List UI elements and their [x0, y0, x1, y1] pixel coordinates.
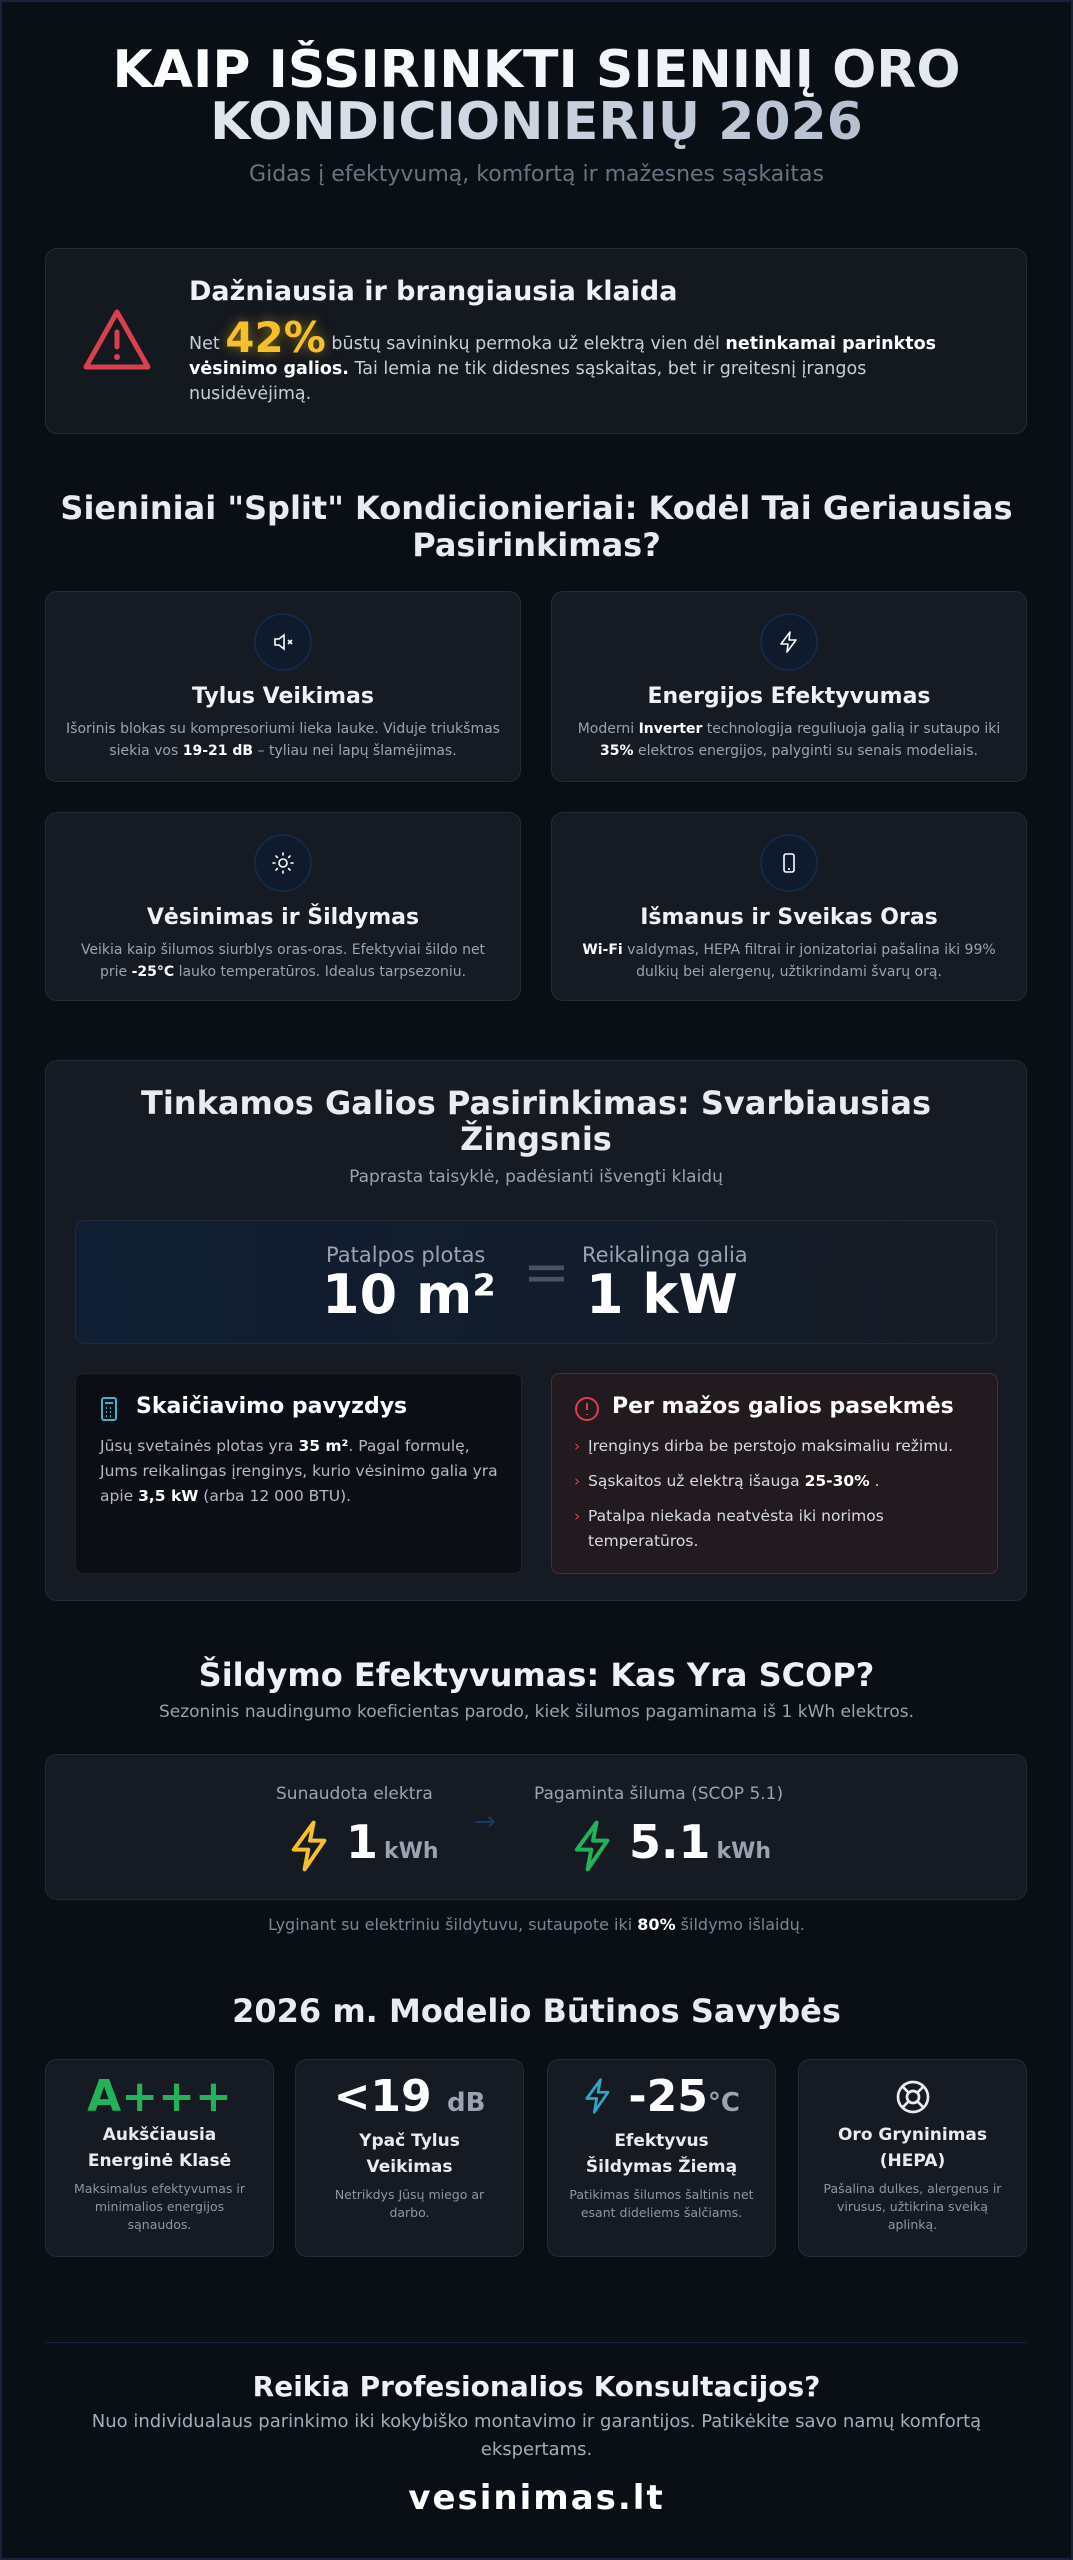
SCOP note: Lyginant su elektriniu šildytuvu, sutaupote iki 80% šildymo išlaidų. — [268, 1915, 805, 1934]
example box: Skaičiavimo pavyzdys — [136, 1394, 407, 1419]
formula box: 1 kW — [586, 1263, 738, 1326]
power heading: Žingsnis — [460, 1120, 612, 1158]
icon: sun — [254, 834, 312, 892]
panel: smart — [551, 812, 1027, 1001]
heading: split: Sieniniai "Split" Kondicionieriai: Kodėl Tai Geriausias — [60, 489, 1013, 527]
feature: quiet: Netrikdys Jūsų miego ar darbo. — [335, 2187, 484, 2220]
panel: energy: Energijos Efektyvumas — [647, 684, 931, 709]
consequences box: Per mažos galios pasekmės — [612, 1394, 954, 1419]
consequences box: › — [574, 1437, 580, 1455]
SCOP subtitle: Sezoninis naudingumo koeficientas parodo, kiek šilumos pagaminama iš 1 kWh elektros. — [159, 1702, 914, 1722]
panel: energy: Moderni Inverter technologija reguliuoja galią ir sutaupo iki 35% elektros energijos, palyginti su senais modeliais. — [578, 721, 1000, 759]
feature: A+++ — [45, 2059, 274, 2257]
consequences box — [551, 1373, 998, 1574]
CTA text: Nuo individualaus parinkimo iki kokybiško montavimo ir garantijos. Patikėkite savo namų komfortą ekspertams. — [92, 2411, 981, 2460]
icon: yellow bolt — [292, 1820, 326, 1872]
icon: calculator — [101, 1397, 117, 1421]
panel: smart: Wi-Fi valdymas, HEPA filtrai ir jonizatoriai pašalina iki 99% dulkių bei alergenų, užtikrindami švarų orą. — [582, 942, 996, 980]
feature: HEPA: Oro Gryninimas (HEPA) — [838, 2125, 987, 2171]
icon: alert circle — [575, 1397, 599, 1421]
panel: alert — [45, 248, 1027, 434]
feature: HEPA: Pašalina dulkes, alergenus ir virusus, užtikrina sveiką aplinką. — [824, 2181, 1001, 2232]
title: KAIP IŠSIRINKTI SIENINĮ ORO — [112, 40, 961, 100]
panel: quiet: Išorinis blokas su kompresoriumi lieka lauke. Viduje triukšmas siekia vos 19-21 dB – tyliau nei lapų šlamėjimas. — [66, 721, 500, 759]
formula box: = — [523, 1240, 570, 1305]
feature: quiet: Ypač Tylus Veikimas — [359, 2131, 460, 2177]
subtitle: Gidas į efektyvumą, komfortą ir mažesnes sąskaitas — [249, 162, 824, 187]
consequences box: › — [574, 1472, 580, 1490]
alert text: Net 42% būstų savininkų permoka už elektrą vien dėl netinkamai parinktos vėsinimo galios. Tai lemia ne tik didesnes sąskaitas, bet ir greitesnį įrangos nusidėvėjimą. — [189, 313, 936, 404]
panel: SCOP comparison: 1 kWh — [346, 1815, 439, 1869]
feature: A+++: A+++ — [87, 2071, 232, 2122]
heading: split: Pasirinkimas? — [412, 526, 661, 564]
panel: power sizing — [45, 1060, 1027, 1601]
feature: A+++: Maksimalus efektyvumas ir minimalios energijos sąnaudos. — [74, 2181, 245, 2232]
feature: -25C — [547, 2059, 776, 2257]
arrow: → — [474, 1807, 496, 1837]
consequences box: Sąskaitos už elektrą išauga 25-30% . — [588, 1472, 880, 1490]
panel: SCOP comparison — [45, 1754, 1027, 1900]
power subtitle: Paprasta taisyklė, padėsianti išvengti klaidų — [349, 1167, 723, 1187]
consequences box: Patalpa niekada neatvėsta iki norimos temperatūros. — [588, 1507, 884, 1550]
icon: green bolt — [574, 1820, 610, 1872]
panel: SCOP comparison: 5.1 kWh — [629, 1815, 771, 1869]
panel: quiet — [45, 591, 521, 782]
panel: heating: Veikia kaip šilumos siurblys oras-oras. Efektyviai šildo net prie -25°C lauko temperatūros. Idealus tarpsezoniu. — [81, 942, 485, 980]
title: KONDICIONIERIŲ 2026 — [210, 92, 863, 152]
example box: Jūsų svetainės plotas yra 35 m². Pagal formulę, Jums reikalingas įrenginys, kurio vėsinimo galia yra apie 3,5 kW (arba 12 000 BTU). — [100, 1437, 498, 1505]
consequences box: Įrenginys dirba be perstojo maksimaliu režimu. — [588, 1437, 953, 1455]
feature: -25C: Efektyvus Šildymas Žiemą — [586, 2131, 737, 2177]
power heading: Tinkamos Galios Pasirinkimas: Svarbiausias — [141, 1084, 931, 1122]
feature: HEPA — [798, 2059, 1027, 2257]
panel: smart: Išmanus ir Sveikas Oras — [640, 905, 938, 930]
feature: -25C: -25°C — [628, 2071, 740, 2122]
icon: mute — [254, 613, 312, 671]
icon: phone — [760, 834, 818, 892]
consequences box: › — [574, 1507, 580, 1525]
icon: warning triangle — [84, 310, 150, 370]
feature: A+++: Aukščiausia Energinė Klasė — [88, 2125, 231, 2171]
alert heading: Dažniausia ir brangiausia klaida — [189, 276, 677, 307]
brand: vesinimas.lt — [408, 2478, 665, 2518]
panel: heating — [45, 812, 521, 1001]
formula box — [75, 1220, 997, 1344]
heading: features: 2026 m. Modelio Būtinos Savybės — [232, 1992, 841, 2030]
panel: SCOP comparison: Sunaudota elektra — [276, 1784, 433, 1804]
CTA heading: Reikia Profesionalios Konsultacijos? — [253, 2370, 820, 2403]
example box — [75, 1373, 522, 1574]
feature: -25C: Patikimas šilumos šaltinis net esant dideliems šalčiams. — [569, 2187, 754, 2220]
icon: bolt — [760, 613, 818, 671]
feature: quiet: <19 dB — [334, 2071, 485, 2122]
feature: quiet — [295, 2059, 524, 2257]
heading: split — [60, 489, 1013, 564]
panel: energy — [551, 591, 1027, 782]
formula box: Reikalinga galia — [582, 1243, 748, 1267]
formula box: 10 m² — [322, 1263, 496, 1326]
power heading — [141, 1084, 931, 1158]
heading: SCOP: Šildymo Efektyvumas: Kas Yra SCOP? — [199, 1656, 874, 1694]
formula box: Patalpos plotas — [326, 1243, 485, 1267]
panel: SCOP comparison: Pagaminta šiluma (SCOP 5.1) — [534, 1784, 783, 1804]
panel: quiet: Tylus Veikimas — [192, 684, 374, 709]
title — [112, 40, 961, 152]
panel: heating: Vėsinimas ir Šildymas — [147, 905, 419, 930]
